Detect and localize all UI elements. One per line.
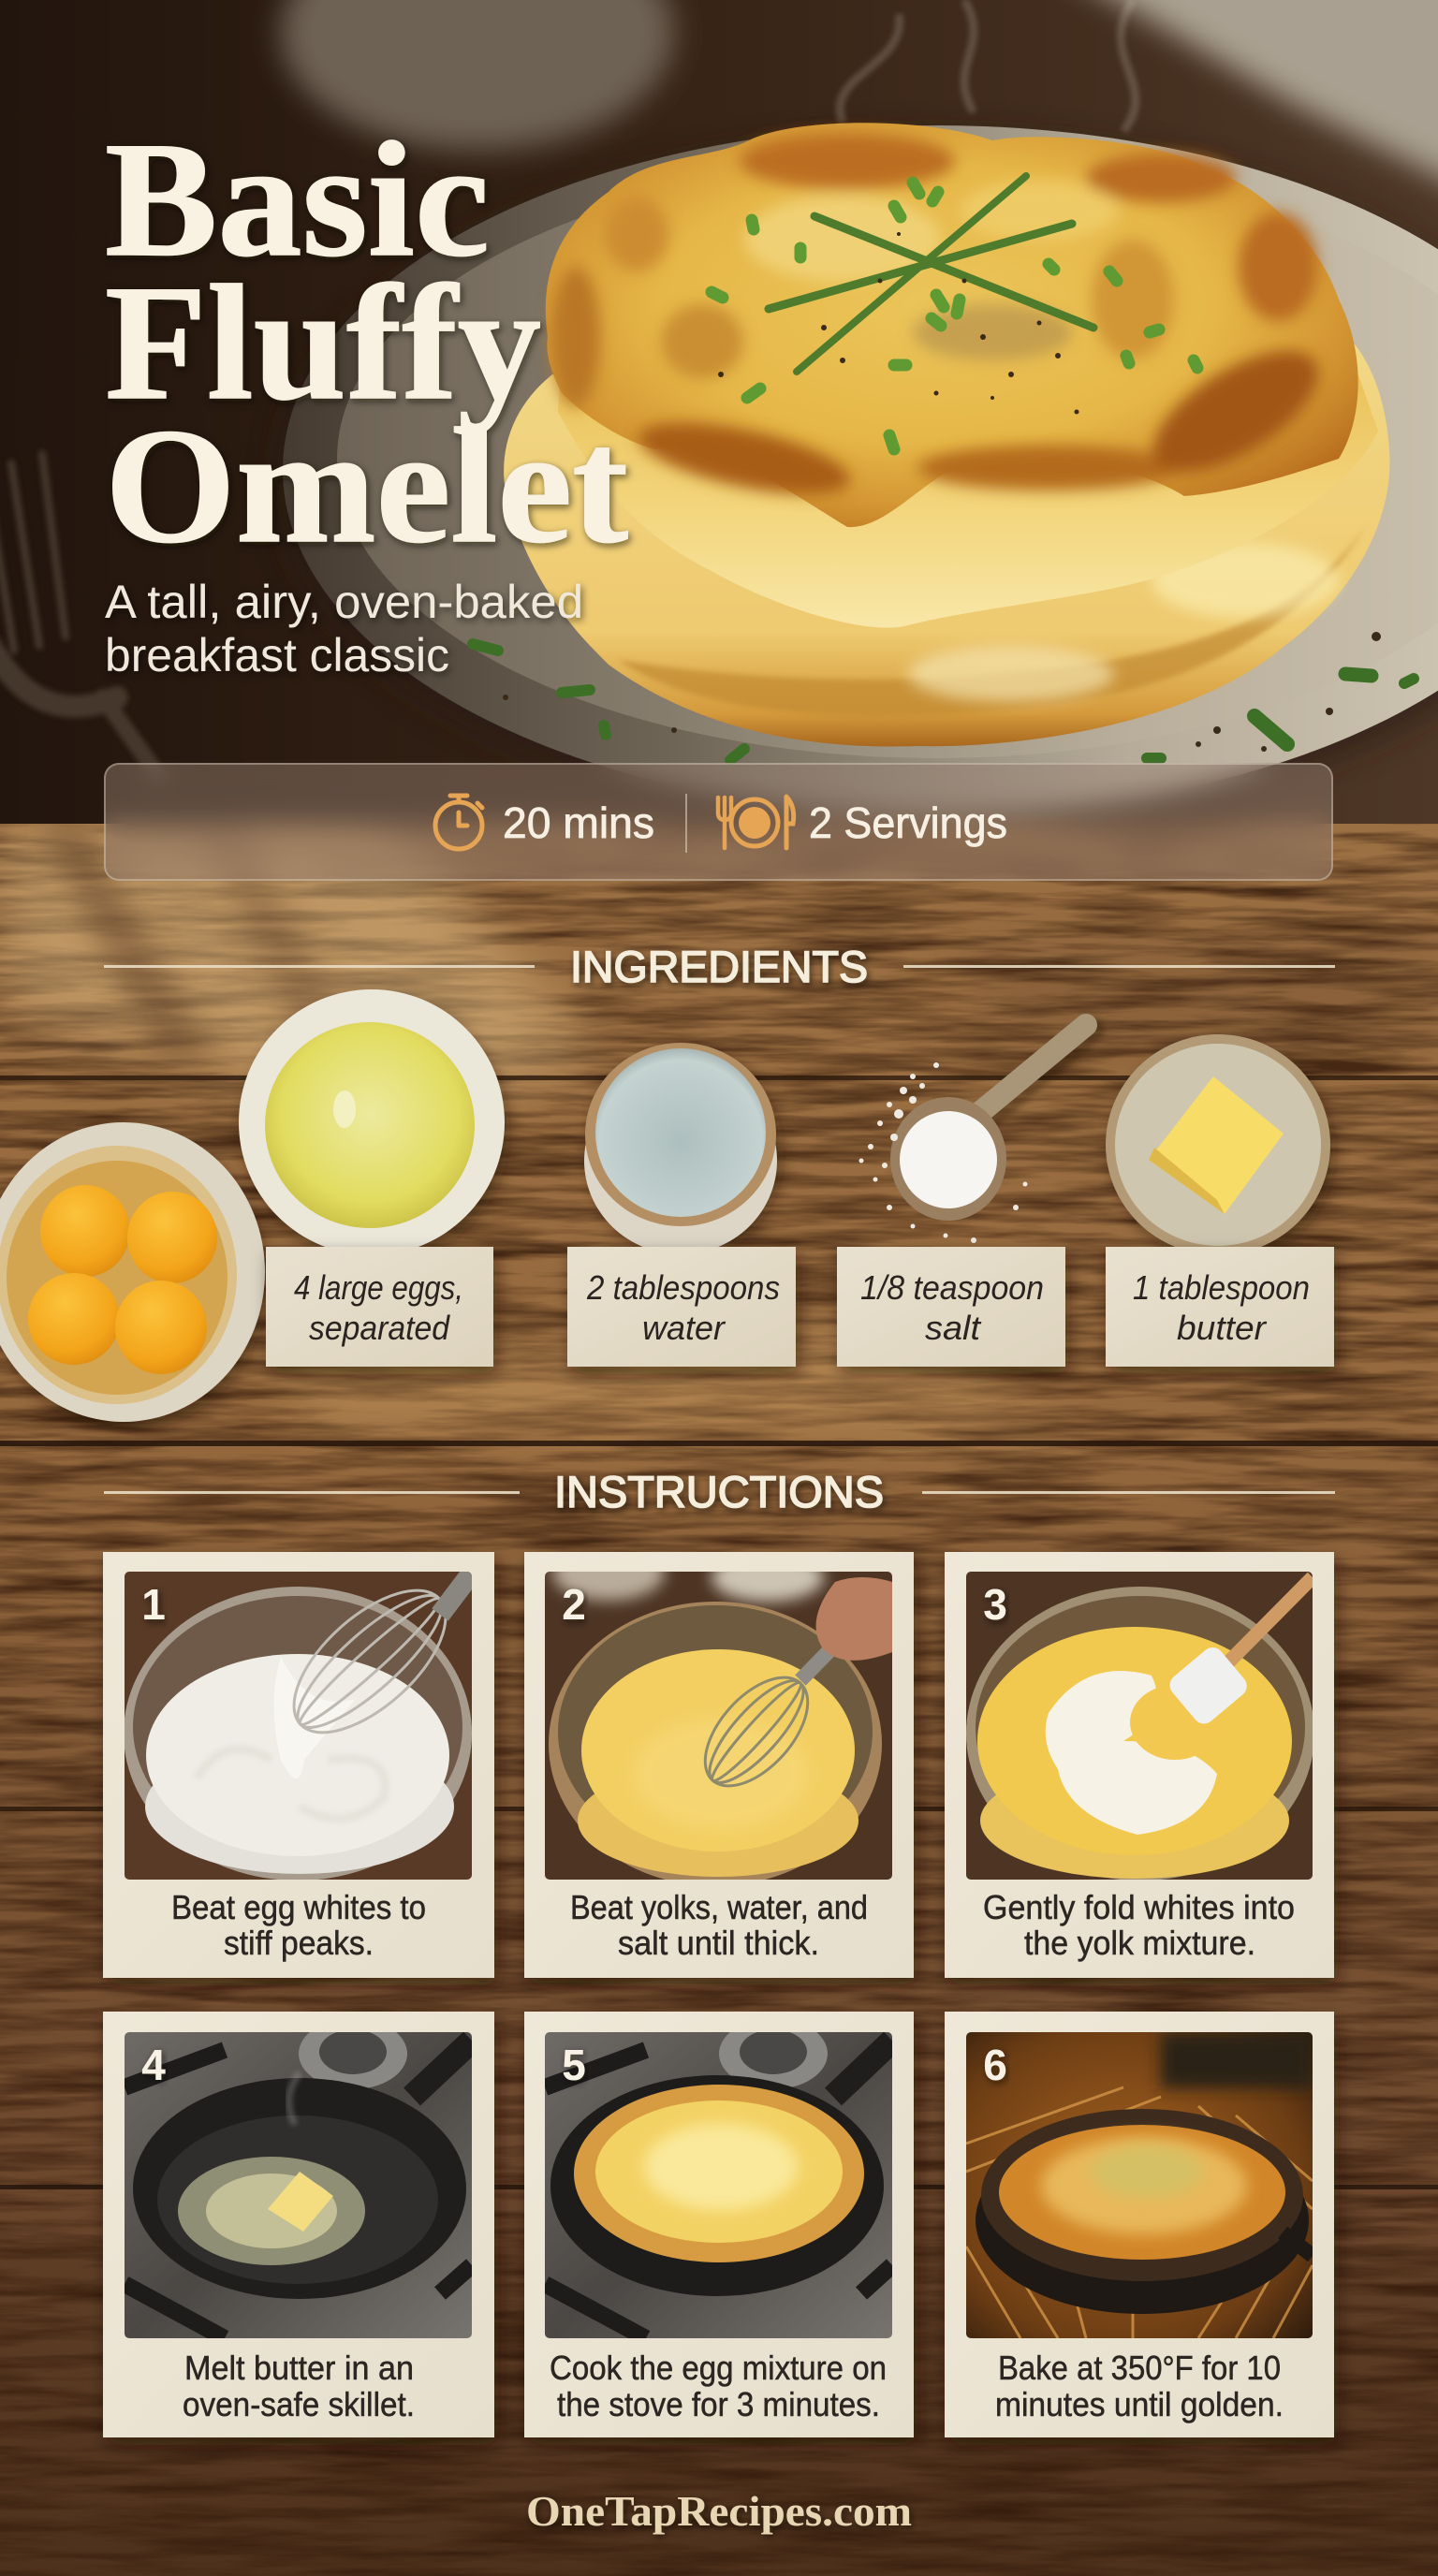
step 5 caption [550,2349,887,2423]
info bar: time and servings [104,763,1333,881]
ingredient note: water: 2 tablespoons [586,1268,780,1307]
step 2 card [524,1544,914,1978]
fork [0,454,159,777]
divider [685,794,687,853]
subtitle: A tall, airy, oven-baked [105,576,583,628]
ingredient note: water: water [642,1309,726,1347]
ingredient note: butter: 1 tablespoon [1133,1268,1310,1307]
step 2 photo: beaten yolks [545,1544,892,1886]
step 6 caption: Bake at 350°F for 10 [998,2349,1281,2387]
step 3 number: 3 [983,1580,1007,1629]
step 2 caption [570,1888,868,1962]
step 6 photo: omelet in oven [966,2032,1313,2338]
step 4 caption: Melt butter in an [184,2349,414,2387]
title: Fluffy [105,252,541,434]
ingredient note: water [567,1247,796,1367]
ingredient note: butter [1106,1247,1334,1367]
ingredient: butter plate [1106,1034,1335,1263]
step 4 card [103,2012,494,2437]
step 1 caption [171,1888,426,1962]
step 3 caption: the yolk mixture. [1024,1924,1255,1962]
footer website: OneTapRecipes.com [526,2487,912,2535]
step 4 number: 4 [141,2041,166,2089]
heading: ingredients [104,942,1335,991]
step 2 number: 2 [562,1580,586,1629]
ingredient note: butter: butter [1177,1309,1268,1347]
step 3 caption: Gently fold whites into [983,1888,1295,1926]
step 1 card [103,1552,494,1978]
label: time: 20 mins [503,798,654,847]
step 6 card [945,2012,1334,2437]
ingredient: egg yolks bowl [0,1122,268,1430]
step 1 caption: stiff peaks. [224,1924,374,1962]
step 2 caption: salt until thick. [618,1924,819,1962]
subtitle [105,576,583,681]
step 4 photo: butter in skillet [125,2018,472,2338]
ingredient note: eggs: separated [309,1309,450,1347]
ingredient: water bowl [584,1043,783,1261]
chives garnish [473,176,1414,760]
title: Omelet [105,395,628,578]
ingredient note: eggs: 4 large eggs, [294,1268,463,1307]
omelet middle puff [558,346,1378,628]
step 1 number: 1 [141,1580,166,1629]
plate [1281,691,1438,767]
ingredient note: salt [837,1247,1065,1367]
wood table background [0,822,1438,2576]
step 1 photo: beaten egg whites [124,1565,472,1881]
step 5 caption: Cook the egg mixture on [550,2349,887,2387]
icon: plate with fork and knife [718,797,794,848]
step 6 caption [995,2349,1284,2423]
blurred towel [1076,0,1438,198]
ingredient note: eggs [266,1247,493,1367]
subtitle: breakfast classic [105,629,449,681]
steam [840,0,1136,131]
ingredient note: salt: salt [925,1309,982,1347]
step 4 caption: oven-safe skillet. [183,2385,415,2423]
hero photo: fluffy omelet on plate [0,0,1438,830]
step 5 caption: the stove for 3 minutes. [557,2385,880,2423]
step 5 number: 5 [562,2041,586,2089]
label: servings: 2 Servings [809,798,1007,847]
blurred mug [281,0,674,150]
heading: instructions [104,1467,1335,1516]
icon: stopwatch [435,796,482,849]
step 1 caption: Beat egg whites to [171,1888,426,1926]
omelet bottom layer [504,337,1389,746]
title [105,109,628,578]
heading: instructions: INSTRUCTIONS [554,1467,884,1516]
step 3 caption [983,1888,1295,1962]
ingredient note: salt: 1/8 teaspoon [860,1268,1044,1307]
step 3 photo: folding whites [966,1572,1314,1881]
step 6 caption: minutes until golden. [995,2385,1284,2423]
step 5 photo: omelet on stove [545,2018,892,2338]
step 6 number: 6 [983,2041,1007,2089]
ingredient: egg whites bowl [239,989,509,1264]
heading: ingredients: INGREDIENTS [570,942,868,991]
black pepper specks [503,232,1381,752]
omelet top crust [546,123,1358,527]
step 2 caption: Beat yolks, water, and [570,1888,868,1926]
step 3 card [945,1552,1334,1978]
ingredient: salt spoon [859,1025,1093,1262]
title: Basic [105,109,490,291]
step 5 card [524,2012,914,2437]
step 4 caption [183,2349,415,2423]
